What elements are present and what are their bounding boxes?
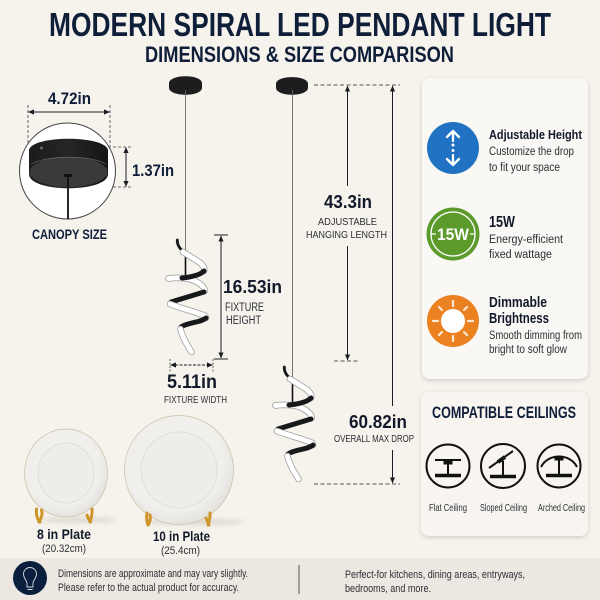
canopy width dimension: 4.72in	[48, 90, 91, 108]
icon: height arrows	[427, 122, 479, 174]
feature: wattage: 15W	[489, 214, 516, 231]
overall max drop dimension: 60.82in	[349, 411, 407, 432]
feature: adjustable height	[427, 122, 583, 174]
disclaimer	[58, 568, 248, 594]
label: 10 in Plate	[153, 528, 210, 544]
usage note	[345, 569, 525, 595]
label: flat ceiling: Flat Ceiling	[429, 503, 467, 514]
feature: dimmable	[427, 294, 582, 356]
icon: 15W badge: 15W	[437, 226, 469, 244]
canopy detail	[20, 90, 174, 242]
feature: dimmable: Smooth dimming from	[489, 330, 582, 342]
footer strip	[0, 558, 600, 600]
overall max drop dimension	[334, 86, 414, 483]
icon: sloped ceiling	[481, 444, 525, 488]
plate: 8 in	[24, 429, 116, 555]
label: 8 in Plate	[37, 526, 91, 542]
disclaimer: Dimensions are approximate and may vary slightly.	[58, 568, 248, 580]
canopy circle magnifier	[20, 123, 116, 219]
plate: 8 in: (20.32cm)	[42, 543, 86, 555]
icon: flat ceiling	[426, 444, 470, 488]
panel: compatible ceilings	[421, 392, 588, 536]
hanging length dimension: 43.3in	[324, 191, 372, 212]
fixture height dimension: HEIGHT	[226, 315, 261, 327]
icon: light bulb	[13, 561, 47, 595]
feature: wattage: fixed wattage	[489, 249, 552, 261]
icon: gold stand	[36, 509, 92, 522]
canopy height dimension: 1.37in	[132, 161, 174, 180]
feature: dimmable: bright to soft glow	[489, 344, 568, 356]
feature: adjustable height: Customize the drop	[489, 146, 574, 158]
hanging length dimension: ADJUSTABLE	[318, 216, 377, 228]
feature: adjustable height: Adjustable Height	[489, 127, 583, 142]
fixture width dimension: FIXTURE WIDTH	[164, 395, 227, 406]
fixture height dimension: FIXTURE	[225, 302, 264, 314]
subtitle: DIMENSIONS & SIZE COMPARISON	[145, 42, 454, 67]
fixture height dimension	[214, 235, 282, 359]
hanging length dimension: HANGING LENGTH	[306, 229, 387, 241]
icon: gold stand	[147, 513, 210, 525]
pendant light: short	[168, 76, 206, 352]
feature: adjustable height: to fit your space	[489, 162, 560, 174]
icon: sun	[427, 295, 479, 347]
fixture width dimension	[164, 359, 227, 406]
hanging length dimension	[306, 85, 400, 484]
pendant light: full drop	[276, 77, 313, 479]
icon: arched ceiling	[538, 444, 580, 488]
canopy label: CANOPY SIZE	[32, 226, 107, 242]
plate: 10 in	[124, 416, 245, 557]
feature: wattage	[426, 208, 564, 261]
canopy height dimension	[108, 147, 174, 187]
feature: dimmable: Brightness	[489, 310, 549, 327]
plate: 10 in: (25.4cm)	[161, 545, 200, 557]
feature: wattage: Energy-efficient	[489, 234, 564, 246]
panel: features	[422, 78, 588, 379]
usage note: bedrooms, and more.	[345, 583, 431, 595]
fixture height dimension: 16.53in	[223, 276, 282, 297]
fixture width dimension: 5.11in	[167, 372, 217, 393]
canopy width dimension	[28, 90, 110, 146]
disclaimer: Please refer to the actual product for accuracy.	[58, 582, 239, 594]
feature: dimmable: Dimmable	[489, 294, 547, 311]
label: sloped ceiling: Sloped Ceiling	[480, 503, 527, 514]
usage note: Perfect-for kitchens, dining areas, entryways,	[345, 569, 525, 581]
overall max drop dimension: OVERALL MAX DROP	[334, 434, 414, 445]
